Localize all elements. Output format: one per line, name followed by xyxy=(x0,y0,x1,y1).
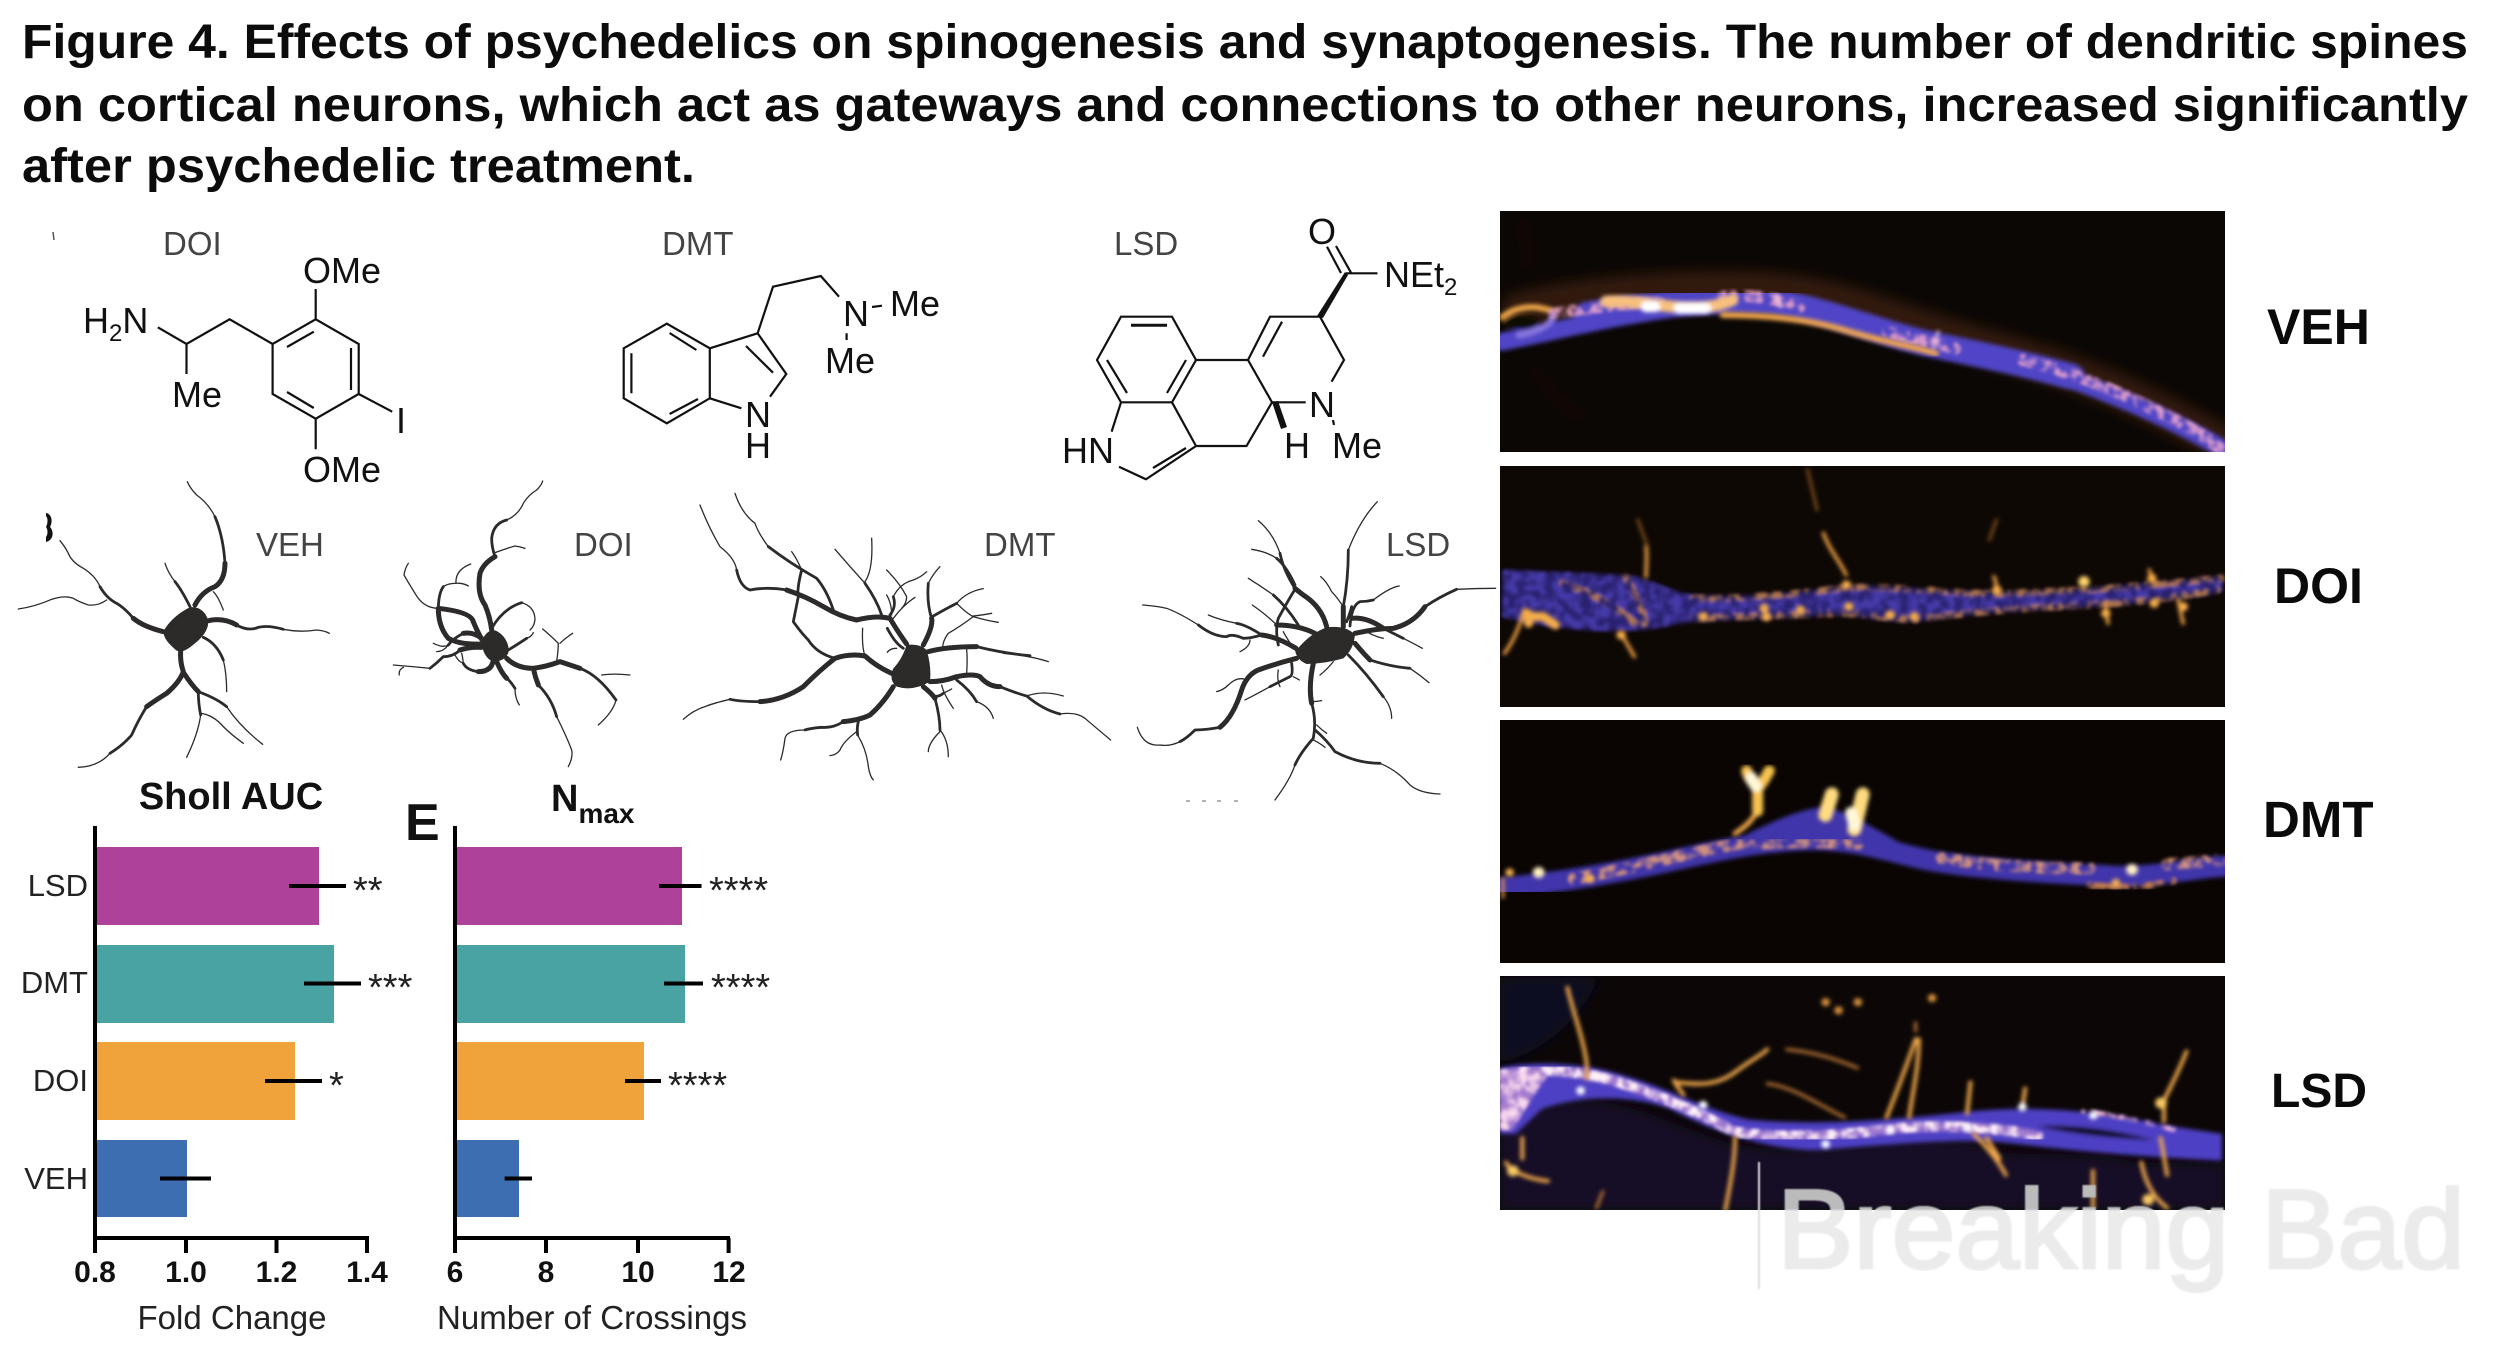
tick labels xyxy=(447,1256,746,1289)
axes xyxy=(93,826,369,1253)
molecule: DMT: DMT xyxy=(662,225,733,262)
neuron: DMT: DMT xyxy=(984,526,1055,563)
micrograph: DOI xyxy=(1490,466,2225,707)
tick labels: 8 xyxy=(538,1256,554,1289)
tick labels: 12 xyxy=(712,1256,746,1289)
watermark: Breaking Bad: Breaking Bad xyxy=(1777,1167,2465,1292)
molecule: DOI: 2 xyxy=(109,320,122,347)
molecule: DMT: N xyxy=(745,394,771,435)
molecule: LSD: N xyxy=(1309,384,1335,425)
axis label: Fold Change xyxy=(138,1299,326,1336)
category labels: DOI xyxy=(33,1063,88,1098)
watermark: Breaking Bad: Breaking Bad xyxy=(1777,1167,2465,1292)
significance stars: **** xyxy=(668,1065,727,1107)
molecule: DMT: N xyxy=(843,293,869,334)
micrograph: DMT xyxy=(1500,720,2225,963)
chart title: Nmax: N xyxy=(551,778,578,820)
tick labels: 6 xyxy=(447,1256,463,1289)
neuron: LSD xyxy=(1137,502,1496,801)
molecule: DMT: Me xyxy=(890,283,940,324)
molecule: LSD: HN xyxy=(1062,430,1114,471)
significance stars: **** xyxy=(711,967,770,1009)
error bars xyxy=(160,886,361,1178)
micrograph: LSD xyxy=(1500,976,2225,1210)
tick labels: 10 xyxy=(621,1256,655,1289)
molecule: DMT: H xyxy=(745,425,771,466)
neuron: VEH xyxy=(18,482,329,767)
chart: Sholl AUC xyxy=(21,776,413,1336)
bars xyxy=(95,847,334,1217)
micrograph labels: DOI xyxy=(2274,558,2363,614)
neuron: VEH: VEH xyxy=(256,526,324,563)
molecule: DOI xyxy=(83,225,406,490)
significance stars: ** xyxy=(353,870,383,912)
molecule: LSD: H xyxy=(1284,425,1310,466)
neuron: LSD: LSD xyxy=(1386,526,1450,563)
significance stars xyxy=(668,870,770,1107)
tick labels: 1.0 xyxy=(165,1256,207,1289)
error bars xyxy=(505,886,703,1178)
neuron: DOI xyxy=(393,481,633,767)
micrograph: VEH xyxy=(1500,211,2225,452)
tick labels: 1.2 xyxy=(256,1256,297,1289)
significance stars: **** xyxy=(709,870,768,912)
molecule: LSD: Me xyxy=(1332,425,1382,466)
category labels xyxy=(21,868,88,1196)
panel letter E: E xyxy=(405,794,440,852)
molecule: DMT: Me xyxy=(825,340,875,381)
significance stars: * xyxy=(329,1065,344,1107)
tick labels: 0.8 xyxy=(74,1256,116,1289)
category labels: LSD xyxy=(28,868,88,903)
category labels: VEH xyxy=(24,1161,88,1196)
tick labels xyxy=(74,1256,388,1289)
micrograph labels: VEH xyxy=(2267,299,2370,355)
molecule: DOI: H xyxy=(83,300,109,341)
molecule: DOI: I xyxy=(396,400,406,441)
molecule: LSD: LSD xyxy=(1114,225,1178,262)
molecule: LSD: 2 xyxy=(1444,274,1457,301)
micrograph labels: DMT xyxy=(2263,791,2373,848)
chart title: Nmax: max xyxy=(578,798,635,829)
molecule: LSD xyxy=(1062,211,1457,479)
molecule: LSD: NEt xyxy=(1384,254,1444,295)
neuron: DOI: DOI xyxy=(574,526,633,563)
molecule: LSD: O xyxy=(1308,211,1336,252)
molecule: DOI: OMe xyxy=(303,449,381,490)
chart title: Sholl AUC: Sholl AUC xyxy=(139,776,323,818)
tick labels: 1.4 xyxy=(346,1256,388,1289)
significance stars: *** xyxy=(368,967,413,1009)
title: after psychedelic treatment. xyxy=(22,140,695,193)
molecule: DMT xyxy=(624,225,940,466)
bars xyxy=(455,847,685,1217)
category labels: DMT xyxy=(21,965,88,1000)
molecule: DOI: Me xyxy=(172,374,222,415)
micrograph labels: LSD xyxy=(2271,1065,2367,1118)
micrograph labels xyxy=(2263,299,2373,1118)
title: Figure 4. Effects of psychedelics on spinogenesis and synaptogenesis. The number of dendritic spines xyxy=(22,16,2468,69)
chart: Nmax xyxy=(437,778,770,1336)
title xyxy=(22,16,2468,193)
neuron: DMT xyxy=(683,493,1111,780)
molecule: DOI: N xyxy=(122,300,148,341)
axis label: Number of Crossings xyxy=(437,1299,747,1336)
title: on cortical neurons, which act as gateways and connections to other neurons, increased significantly xyxy=(22,79,2468,132)
significance stars xyxy=(329,870,413,1107)
axes xyxy=(453,826,730,1253)
molecule: DOI: DOI xyxy=(163,225,222,262)
molecule: DOI: OMe xyxy=(303,250,381,291)
